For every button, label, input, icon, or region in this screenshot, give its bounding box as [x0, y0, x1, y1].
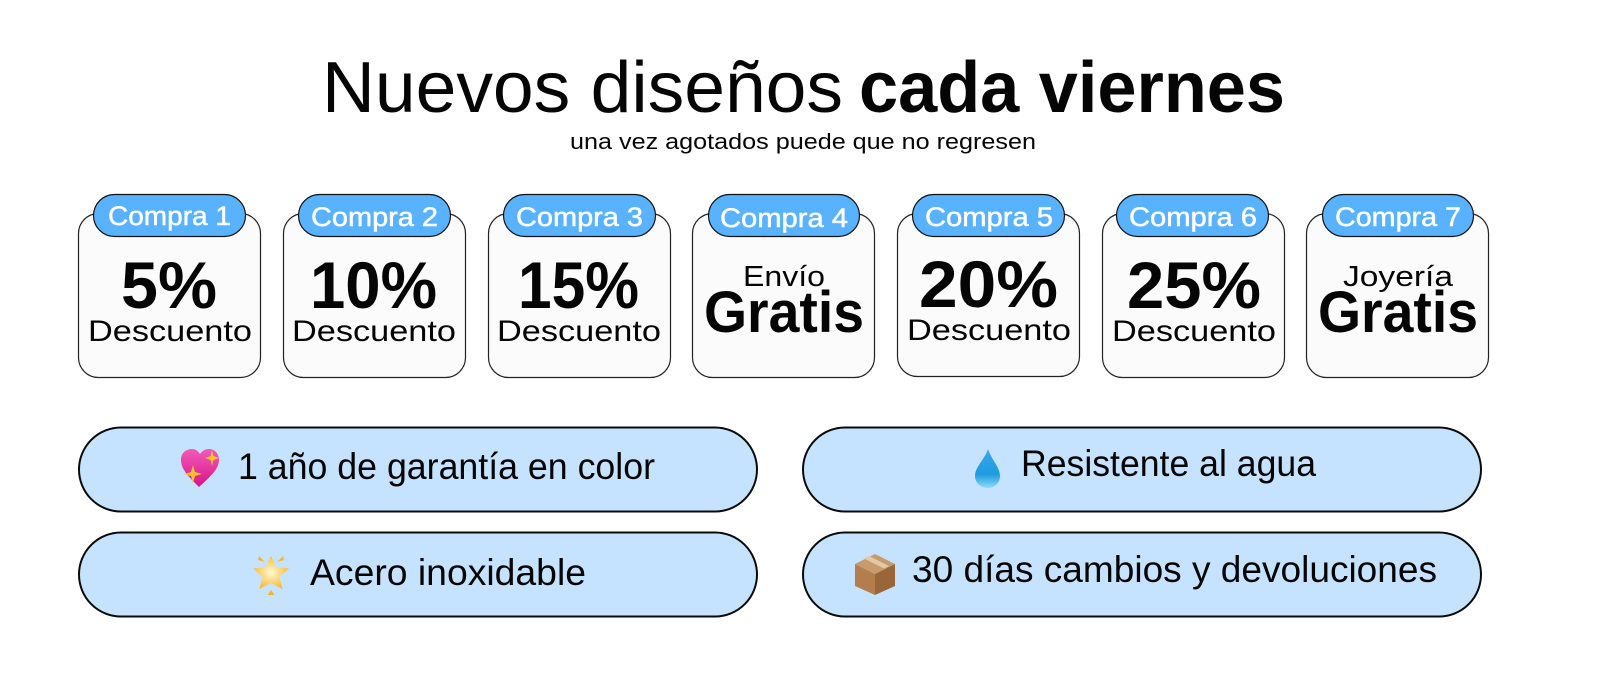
card: compra 3 — [488, 194, 670, 378]
title: cada viernes — [859, 48, 1285, 128]
card: compra 5: Compra 5 — [925, 202, 1053, 232]
card: compra 7: Gratis — [1318, 280, 1478, 345]
card: compra 3: Compra 3 — [516, 202, 643, 232]
card: compra 1: Descuento — [88, 315, 252, 348]
icon: package box — [855, 554, 895, 595]
card: compra 1 — [78, 194, 260, 378]
card: compra 2: Compra 2 — [311, 202, 438, 232]
subtitle: una vez agotados puede que no regresen — [570, 129, 1036, 154]
card: compra 4 — [692, 194, 874, 378]
card: compra 5 — [898, 194, 1080, 376]
card: compra 5: Descuento — [907, 314, 1071, 347]
card: compra 2: 10% — [310, 248, 437, 322]
card: compra 7: Compra 7 — [1335, 202, 1461, 232]
feature: resistente al agua: Resistente al agua — [1021, 443, 1316, 484]
icon: sparkling heart — [181, 449, 219, 487]
card: compra 6 — [1102, 194, 1284, 378]
feature: cambios y devoluciones — [803, 532, 1481, 616]
title: Nuevos diseños — [322, 48, 843, 128]
card: compra 5: 20% — [919, 247, 1058, 321]
feature: cambios y devoluciones: 30 días cambios y devoluciones — [912, 549, 1437, 590]
card: compra 3: Descuento — [497, 315, 661, 348]
card: compra 7: Joyería — [1343, 261, 1454, 293]
card: compra 4: Compra 4 — [720, 203, 848, 233]
icon: water drop — [975, 449, 1000, 488]
feature: acero inoxidable: Acero inoxidable — [310, 552, 586, 593]
card: compra 6: Compra 6 — [1129, 202, 1257, 232]
icon: glowing star — [253, 556, 289, 595]
card: compra 1: Compra 1 — [108, 201, 231, 231]
feature: garantía — [79, 428, 757, 512]
card: compra 7 — [1306, 194, 1488, 378]
card: compra 6: 25% — [1127, 248, 1261, 322]
card: compra 6: Descuento — [1112, 315, 1276, 348]
title — [322, 48, 1285, 128]
card: compra 2: Descuento — [292, 315, 456, 348]
feature: acero inoxidable — [79, 532, 757, 616]
card: compra 3: 15% — [518, 248, 639, 322]
card: compra 4: Gratis — [704, 280, 864, 345]
card: compra 4: Envío — [743, 261, 825, 293]
feature: resistente al agua — [803, 428, 1481, 512]
feature: garantía: 1 año de garantía en color — [238, 446, 655, 487]
card: compra 2 — [284, 194, 466, 378]
card: compra 1: 5% — [121, 248, 217, 322]
